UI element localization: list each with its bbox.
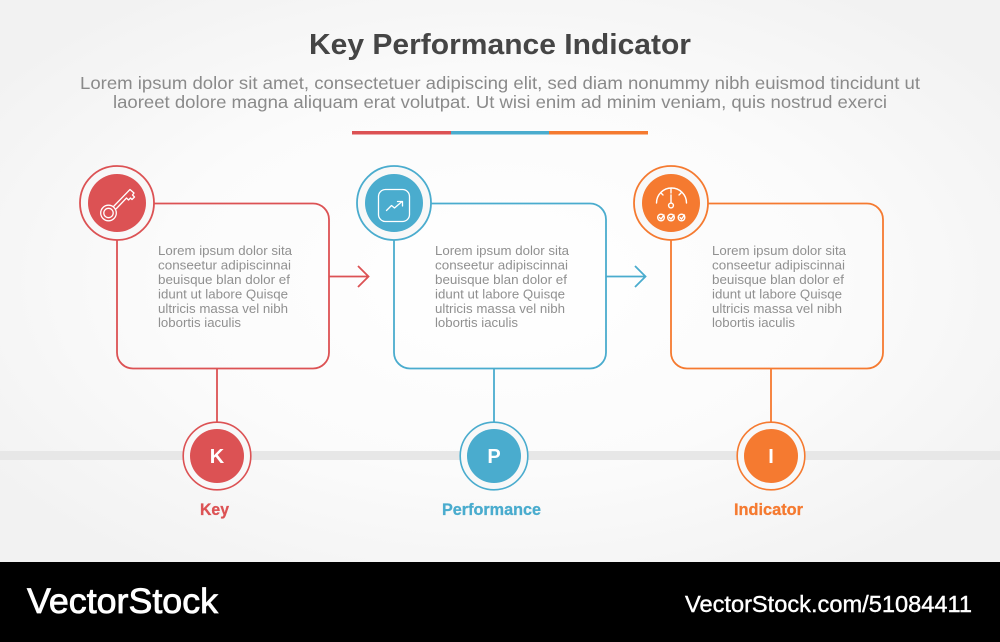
body text: key	[158, 244, 292, 330]
body text: performance: ultricis massa vel nibh	[435, 302, 565, 316]
timeline band	[0, 451, 1000, 460]
label: performance: Performance	[442, 501, 541, 519]
body text: indicator: conseetur adipiscinnai	[712, 258, 845, 272]
lower badge: I: I	[768, 446, 774, 468]
panel: performance	[357, 166, 646, 519]
arrow: key to performance	[329, 266, 368, 287]
subtitle	[80, 73, 920, 112]
lower badge: P: P	[487, 446, 501, 468]
body text: indicator: Lorem ipsum dolor sita	[712, 244, 846, 258]
lower badge: K: K	[210, 446, 225, 468]
body text: performance	[435, 244, 569, 330]
body text: performance: beuisque blan dolor ef	[435, 273, 568, 287]
body text: performance: Lorem ipsum dolor sita	[435, 244, 569, 258]
lower badge: I	[737, 422, 805, 490]
connector: key	[216, 368, 218, 423]
arrow: performance to indicator	[606, 266, 646, 287]
card outline: performance	[394, 204, 606, 368]
footer bar	[0, 562, 1000, 642]
body text: key: beuisque blan dolor ef	[158, 273, 291, 287]
body text: performance: lobortis iaculis	[435, 316, 518, 330]
body text: indicator: beuisque blan dolor ef	[712, 273, 845, 287]
subtitle: laoreet dolore magna aliquam erat volutpat. Ut wisi enim ad minim veniam, quis nostrud exerci	[113, 92, 887, 112]
panel: key	[80, 166, 368, 519]
footer logo: VectorStock	[27, 582, 219, 621]
body text: key: ultricis massa vel nibh	[158, 302, 288, 316]
lower badge: P	[460, 422, 528, 490]
body text: performance: idunt ut labore Quisqe	[435, 288, 565, 302]
body text: key: lobortis iaculis	[158, 316, 241, 330]
lower badge: K	[183, 422, 251, 490]
panel: indicator	[634, 166, 883, 519]
body text: performance: conseetur adipiscinnai	[435, 258, 568, 272]
footer image id: VectorStock.com/51084411	[685, 591, 972, 617]
title underline	[352, 131, 648, 134]
label: key: Key	[200, 501, 230, 519]
subtitle: Lorem ipsum dolor sit amet, consectetuer adipiscing elit, sed diam nonummy nibh euismod tincidunt ut	[80, 73, 920, 93]
label: indicator: Indicator	[734, 501, 804, 519]
connector: performance	[493, 368, 495, 423]
card outline: key	[117, 204, 329, 368]
body text: key: conseetur adipiscinnai	[158, 258, 291, 272]
body text: indicator: ultricis massa vel nibh	[712, 302, 842, 316]
body text: indicator	[712, 244, 846, 330]
body text: indicator: lobortis iaculis	[712, 316, 795, 330]
title: Key Performance Indicator	[309, 29, 691, 61]
body text: key: idunt ut labore Quisqe	[158, 288, 288, 302]
connector: indicator	[770, 368, 772, 423]
body text: key: Lorem ipsum dolor sita	[158, 244, 292, 258]
icon: growth chart	[357, 166, 431, 240]
icon: gauge	[634, 166, 708, 240]
body text: indicator: idunt ut labore Quisqe	[712, 288, 842, 302]
icon: key	[80, 166, 154, 240]
card outline: indicator	[671, 204, 883, 368]
